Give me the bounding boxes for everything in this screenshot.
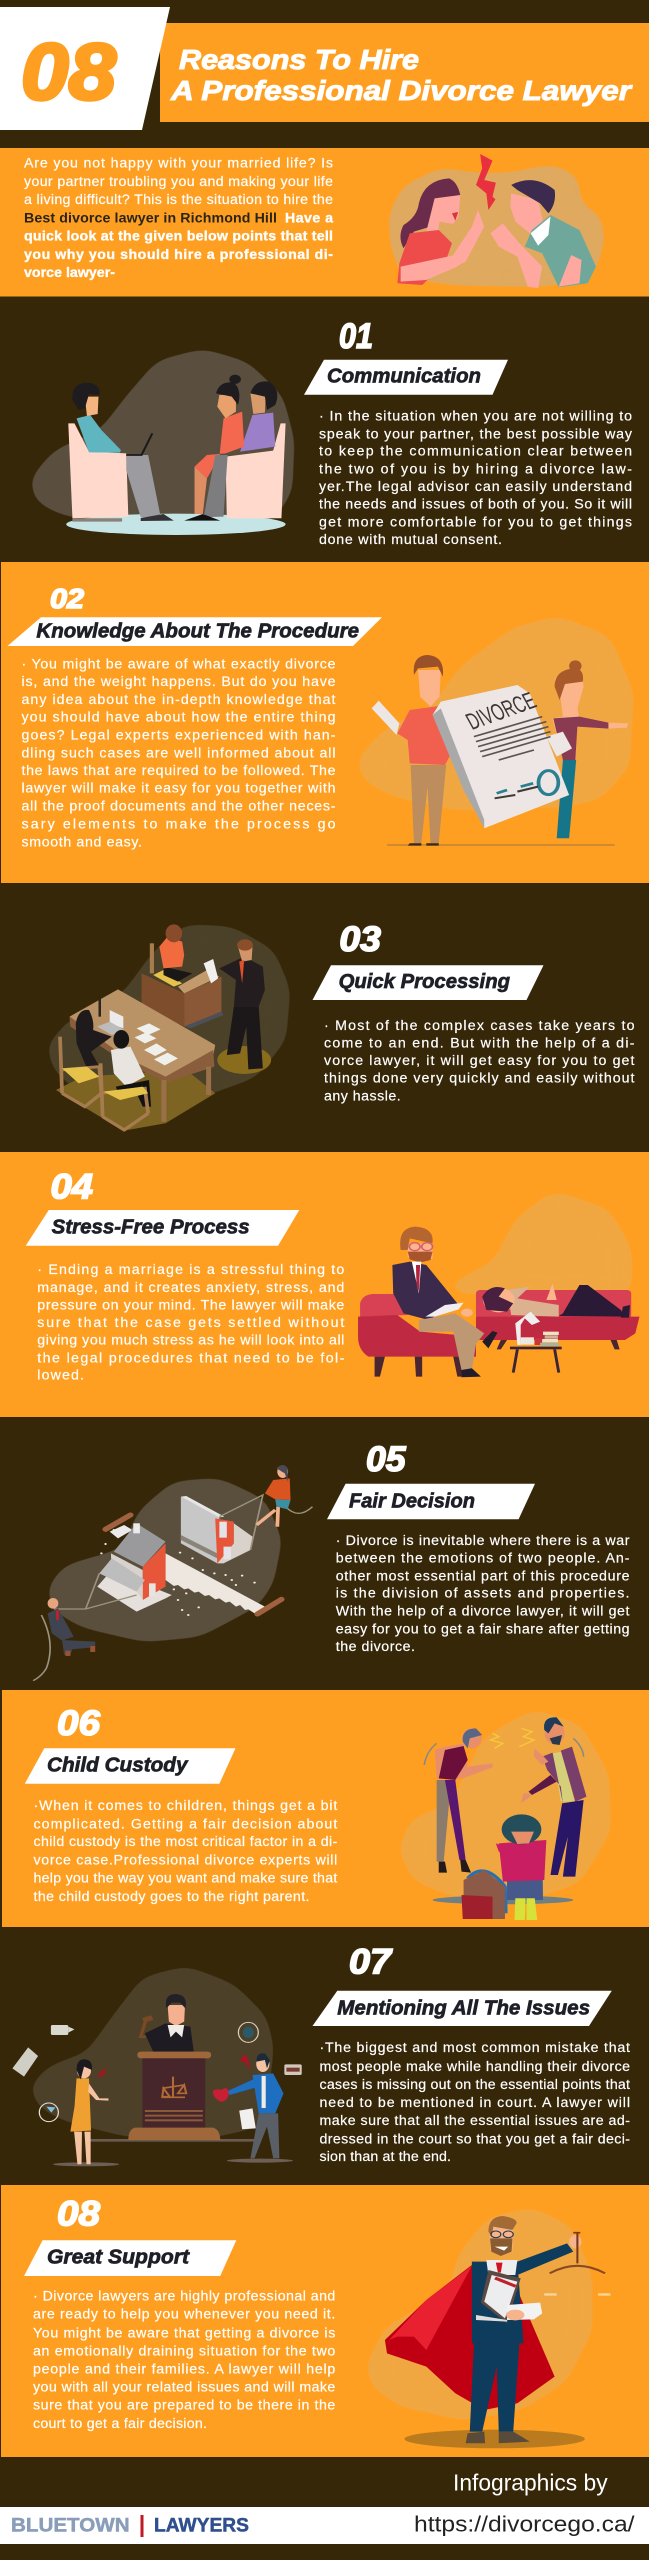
main title: A Professional Divorce Lawyer	[170, 75, 633, 106]
intro text: quick look at the given below points that tell	[24, 228, 333, 244]
body text: between the emotions of two people. An-	[336, 1551, 630, 1567]
logo: Bluetown Lawyers: BLUETOWN	[11, 2516, 130, 2537]
body text: other most essential part of this procedure	[336, 1569, 630, 1585]
number 04: 04	[50, 1167, 93, 1206]
body text: pressure on your mind. The lawyer will make	[37, 1298, 344, 1314]
body text: · Most of the complex cases take years to	[324, 1018, 635, 1034]
illustration: isometric courtroom	[54, 924, 284, 1131]
body text: · Divorce lawyers are highly professional and	[33, 2289, 335, 2305]
body text: · You might be aware of what exactly divorce	[22, 656, 336, 672]
body text: easy for you to get a fair share after getting	[336, 1621, 630, 1637]
body text: smooth and easy.	[22, 835, 142, 851]
body text: the legal procedures that need to be fol-	[37, 1350, 345, 1366]
body text: the two of you is by hiring a divorce law-	[319, 461, 632, 477]
body text: · Divorce is inevitable where there is a war	[336, 1533, 630, 1549]
intro text: Best divorce lawyer in Richmond Hill	[24, 210, 277, 226]
white number tab	[0, 7, 170, 130]
body text: is the division of assets and properties.	[336, 1586, 630, 1602]
body text: is, and the weight happens. But do you have	[22, 674, 336, 690]
body text: done with mutual consent.	[319, 532, 502, 548]
illustration: superhero lawyer with scales	[373, 2213, 611, 2448]
intro text: you why you should hire a professional di-	[24, 247, 333, 263]
footer	[0, 2457, 649, 2560]
illustration: courtroom judge and arguing couple	[12, 1972, 302, 2166]
body text: sary elements to make the process go	[22, 817, 336, 833]
body text: complicated. Getting a fair decision about	[34, 1816, 337, 1832]
panel: 01 communication	[0, 296, 649, 562]
illustration: lawyer with client on sofa	[358, 1197, 639, 1377]
number 07: 07	[349, 1942, 393, 1981]
body text: all the proof documents and the other neces-	[22, 799, 336, 815]
body text	[33, 2289, 335, 2432]
intro text: your partner troubling you and making your life	[24, 174, 333, 190]
body text	[319, 409, 633, 548]
intro text: Have a	[285, 210, 333, 226]
intro text	[24, 156, 333, 281]
body text: · Ending a marriage is a stressful thing to	[37, 1262, 344, 1278]
body text: the child custody goes to the right parent.	[34, 1889, 310, 1905]
number 06: 06	[57, 1704, 101, 1743]
body text: you with all your related issues and will make	[33, 2379, 335, 2395]
body text: You might be aware that getting a divorce is	[33, 2325, 335, 2341]
body text: vorce lawyer, it will get easy for you to get	[324, 1053, 635, 1069]
body text: come to an end. But with the help of a di-	[324, 1036, 635, 1052]
number 05: 05	[366, 1440, 406, 1479]
heading banner: Knowledge About The Procedure	[36, 621, 359, 643]
body text: sure that you are prepared to be there in the	[33, 2397, 335, 2413]
body text: sion than at the end.	[320, 2149, 451, 2165]
heading banner: Stress-Free Process	[52, 1216, 250, 1238]
panel: introduction	[0, 148, 649, 296]
body text: to keep the communication clear between	[319, 444, 632, 460]
body text: cases is missing out on the essential points that	[320, 2077, 630, 2093]
body text: you should have about how the entire thing	[22, 710, 336, 726]
heading banner	[312, 965, 544, 1000]
body text: help you the way you want and make sure that	[34, 1870, 337, 1886]
body text: people and their families. A lawyer will help	[33, 2362, 335, 2378]
main title: Reasons To Hire	[179, 44, 419, 75]
website url: https://divorcego.ca/	[414, 2512, 635, 2537]
heading banner: Fair Decision	[349, 1490, 475, 1512]
big number 08: 08	[21, 27, 117, 116]
body text: the divorce.	[336, 1639, 415, 1655]
logo: Bluetown Lawyers: LAWYERS	[154, 2516, 249, 2537]
heading banner: Great Support	[47, 2246, 190, 2268]
logo: Bluetown Lawyers	[11, 2515, 249, 2537]
body text	[37, 1262, 345, 1384]
body text	[324, 1018, 635, 1104]
panel: 05 fair decision	[0, 1417, 649, 1690]
heading banner	[26, 1210, 299, 1246]
body text: get more comfortable for you to get things	[319, 514, 632, 530]
illustration: couple consulting a lawyer	[37, 354, 288, 535]
body text: most people make while handling their divorce	[320, 2059, 630, 2075]
body text: lowed.	[37, 1368, 84, 1384]
body text: lawyer will make it easy for you together with	[22, 781, 336, 797]
body text: ·When it comes to children, things get a bit	[34, 1798, 337, 1814]
body text: need to be mentioned in court. A lawyer will	[320, 2095, 630, 2111]
body text: the laws that are required to be followed. The	[22, 763, 336, 779]
illustration: arguing couple	[395, 154, 598, 288]
illustration: couple sawing a house in half	[33, 1465, 312, 1681]
heading banner	[24, 2240, 236, 2276]
body text: are ready to help you whenever you need it.	[33, 2307, 335, 2323]
intro text: a living difficult? This is the situation to hire the	[24, 192, 333, 208]
body text	[22, 656, 336, 851]
number 03: 03	[339, 920, 382, 959]
body text: yer.The legal advisor can easily understand	[319, 479, 632, 495]
body text: ·The biggest and most common mistake that	[320, 2040, 630, 2056]
heading banner	[312, 1991, 612, 2026]
intro text: Are you not happy with your married life? Is	[24, 156, 333, 172]
white logo strip	[0, 2507, 649, 2544]
intro text: vorce lawyer-	[24, 265, 115, 281]
body text: With the help of a divorce lawyer, it will get	[336, 1604, 630, 1620]
heading banner: Quick Processing	[339, 971, 510, 993]
heading banner	[8, 617, 382, 646]
heading banner	[304, 360, 508, 395]
panel: 04 stress-free process	[0, 1152, 649, 1417]
body text: manage, and it creates anxiety, stress, and	[37, 1280, 344, 1296]
body text: things done very quickly and easily without	[324, 1071, 635, 1087]
body text: the needs and issues of both of you. So it will	[319, 497, 632, 513]
heading banner: Communication	[327, 366, 481, 388]
panel: 02 knowledge about the procedure	[1, 562, 649, 883]
illustration: arguing parents and child	[406, 1715, 604, 1920]
credit line: Infographics by	[453, 2470, 608, 2496]
body text: sure that the case gets settled without	[37, 1315, 344, 1331]
body text: dling such cases are well informed about all	[22, 745, 336, 761]
panel: 08 great support	[1, 2185, 649, 2457]
heading banner: Mentioning All The Issues	[337, 1997, 590, 2019]
body text: speak to your partner, the best possible way	[319, 426, 633, 442]
heading banner: Child Custody	[47, 1754, 188, 1776]
body text: make sure that all the essential issues are ad-	[320, 2113, 630, 2129]
heading banner	[25, 1748, 235, 1784]
panel: 07 mentioning all the issues	[0, 1928, 649, 2185]
body text	[320, 2040, 630, 2165]
number 02: 02	[50, 583, 84, 614]
illustration: couple holding divorce document: DIVORCE	[461, 687, 541, 735]
body text: an emotionally draining situation for the two	[33, 2343, 335, 2359]
number 08: 08	[57, 2195, 101, 2234]
heading banner	[327, 1484, 535, 1519]
body text	[336, 1533, 630, 1655]
body text: vorce case.Professional divorce experts will	[34, 1852, 337, 1868]
header: title banner	[0, 7, 649, 130]
body text: goes? Legal experts experienced with han-	[22, 727, 336, 743]
illustration: couple holding divorce document	[364, 622, 628, 846]
panel: 06 child custody	[2, 1690, 649, 1927]
body text: child custody is the most critical factor in a di-	[34, 1834, 338, 1850]
main title	[170, 44, 633, 106]
body text: any idea about the in-depth knowledge that	[22, 692, 336, 708]
number 01: 01	[339, 317, 373, 356]
body text	[34, 1798, 338, 1905]
body text: giving you much stress as he will look into all	[37, 1333, 344, 1349]
body text: court to get a fair decision.	[33, 2416, 207, 2432]
panel: 03 quick processing	[0, 884, 649, 1152]
body text: any hassle.	[324, 1088, 401, 1104]
body text: dressed in the court so that you get a fair deci-	[320, 2131, 630, 2147]
body text: · In the situation when you are not willing to	[319, 409, 632, 425]
